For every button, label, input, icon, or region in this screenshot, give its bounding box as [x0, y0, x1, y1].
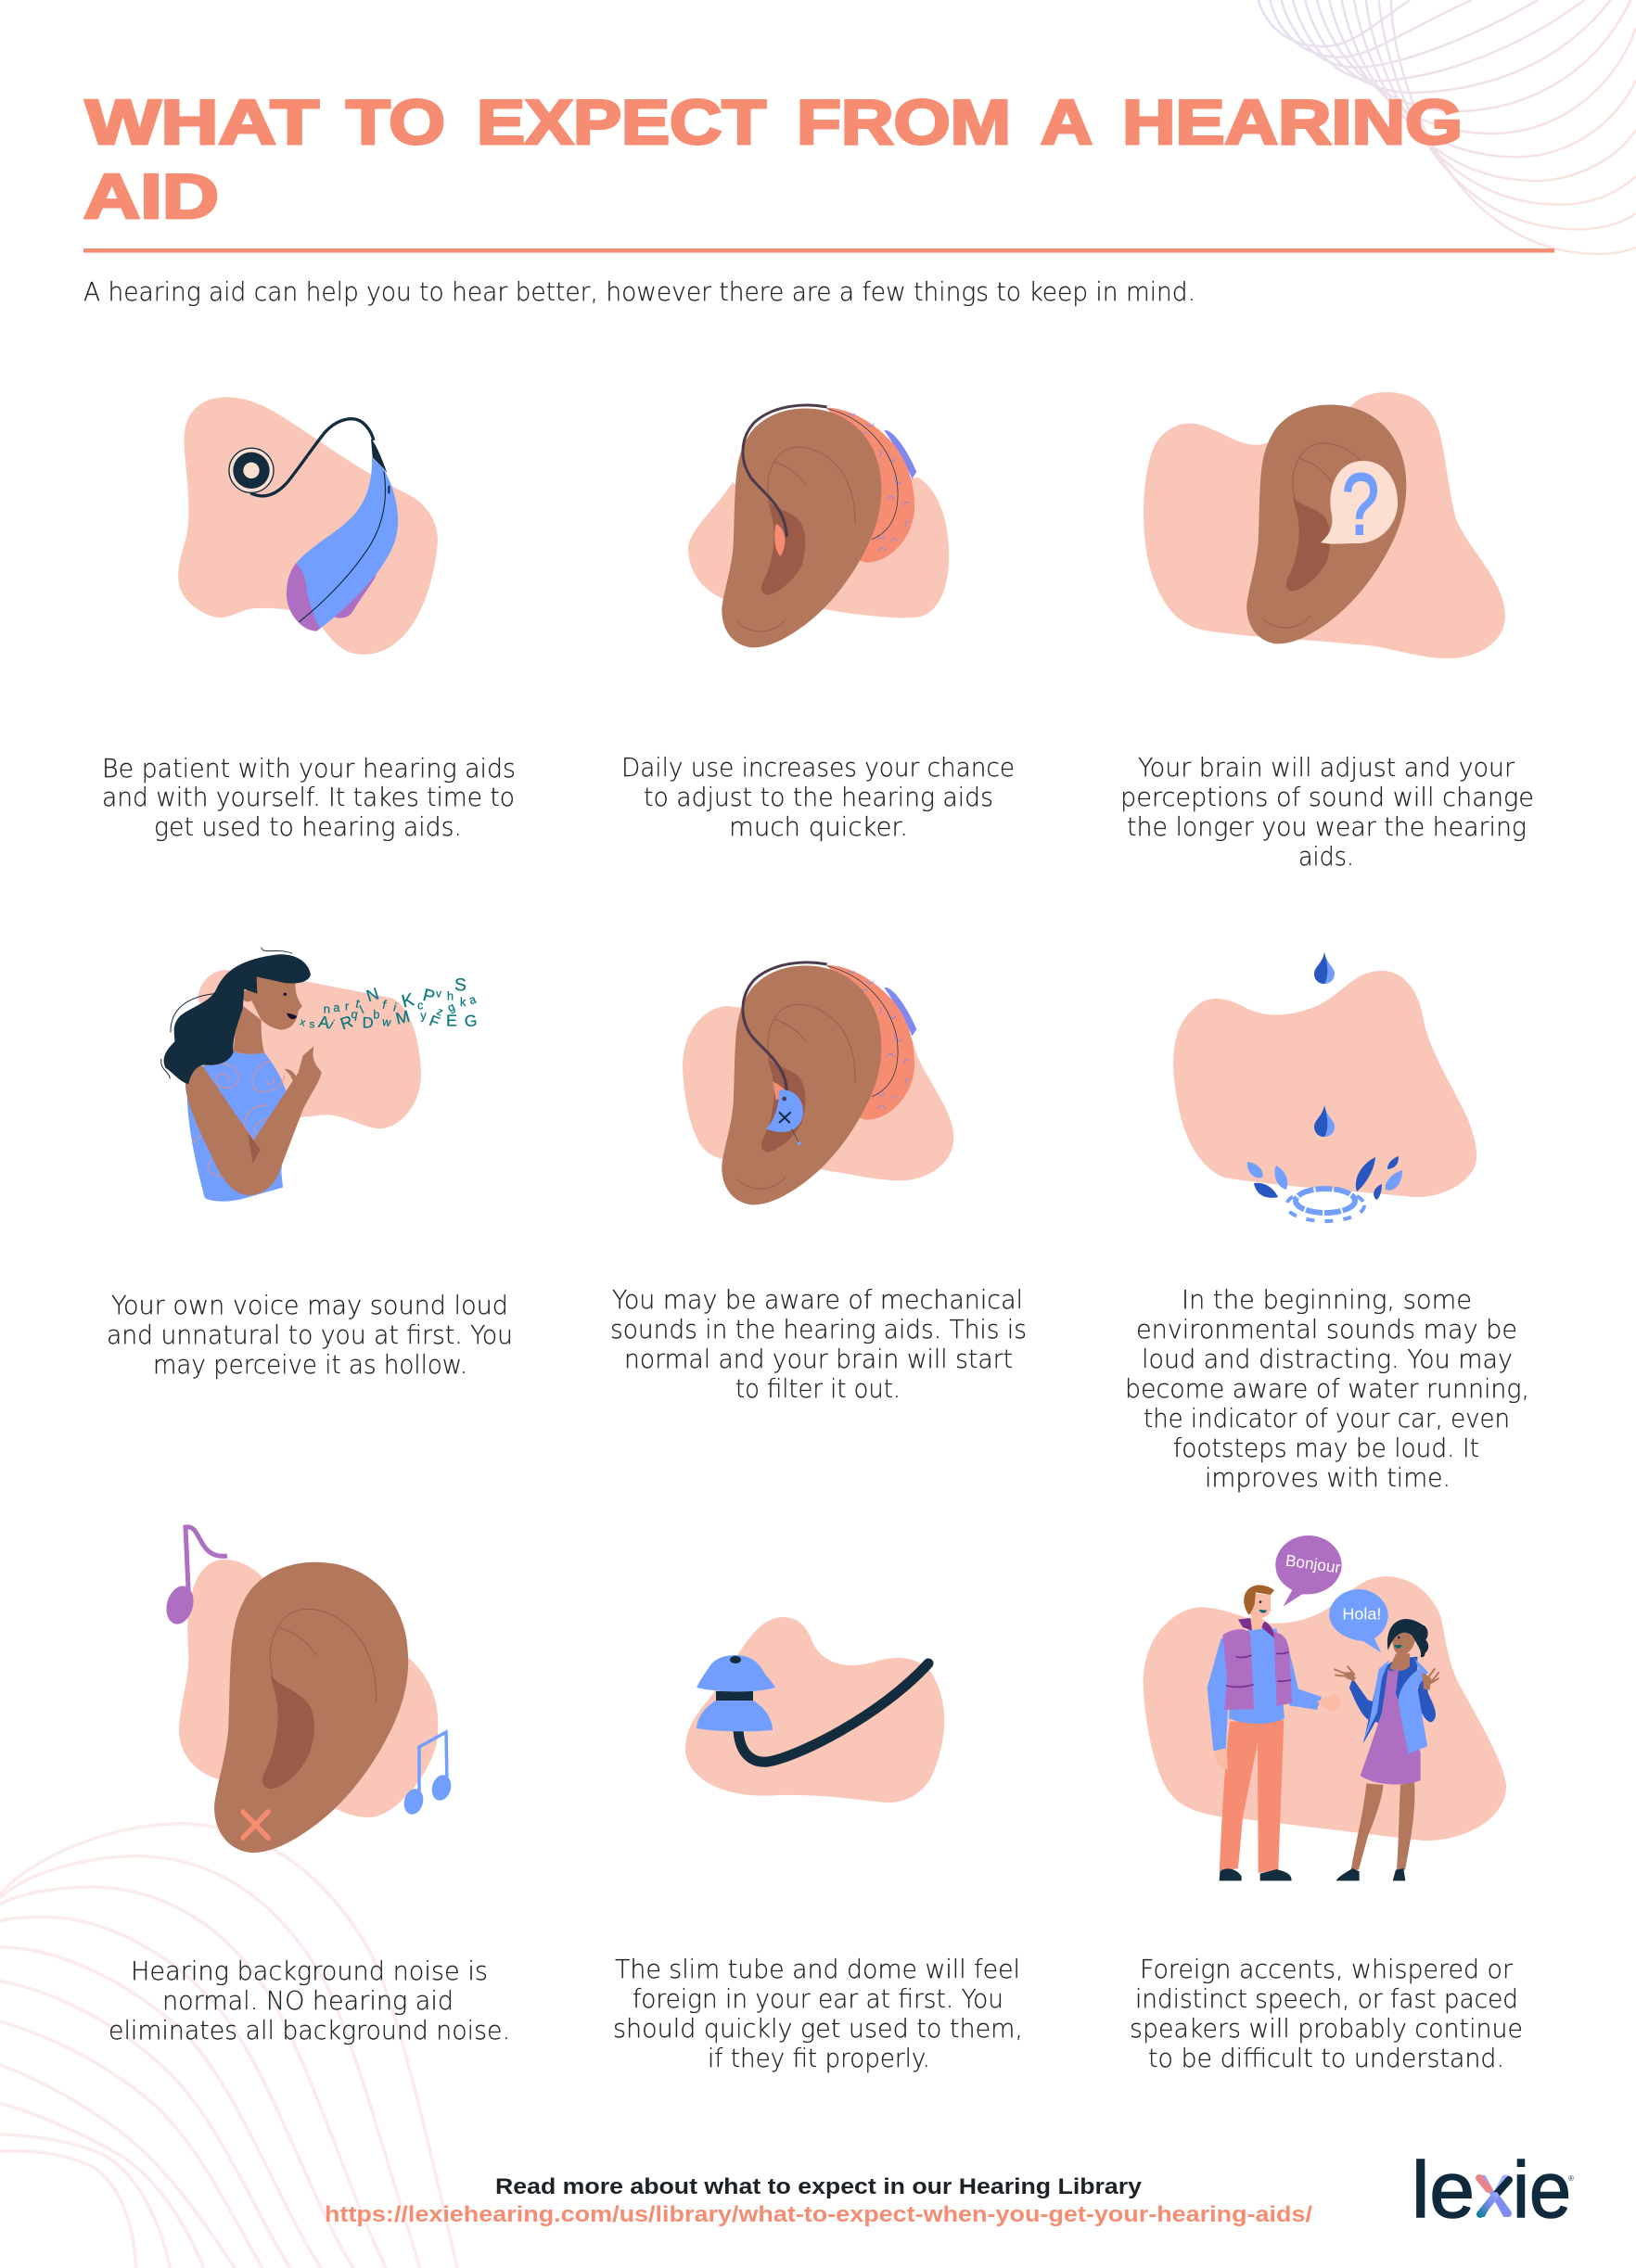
speech letters: y — [420, 1009, 427, 1022]
footer text — [325, 2174, 1312, 2227]
speech letters: G — [464, 1011, 478, 1030]
caption 8: The slim tube and dome will feel — [615, 1955, 1020, 1984]
logo: lexie: ie — [1513, 2147, 1571, 2235]
caption 4: and unnatural to you at first. You — [107, 1320, 513, 1350]
title: EXPECT — [477, 87, 766, 158]
caption 2 — [621, 753, 1015, 842]
illustration: ear with in-ear receiver and tool icon — [683, 962, 953, 1204]
speech letters: F — [427, 1012, 442, 1032]
caption 8: should quickly get used to them, — [613, 2014, 1023, 2044]
decorative curves: top right — [1259, 0, 1636, 254]
illustration: two people talking in foreign languages — [1144, 1535, 1506, 1880]
title: HEARING — [1122, 87, 1463, 158]
decorative curves: bottom left — [0, 1824, 457, 2268]
title: WHAT — [85, 87, 319, 158]
caption 2: much quicker. — [729, 812, 908, 842]
title: FROM — [797, 87, 1011, 158]
speech letters: S — [454, 975, 467, 995]
logo: lexie: ® — [1568, 2174, 1574, 2183]
footer text: Read more about what to expect in our Hearing Library — [495, 2174, 1143, 2199]
caption 9: to be difficult to understand. — [1148, 2044, 1504, 2073]
speech letters: K — [400, 990, 416, 1013]
caption 8 — [613, 1955, 1023, 2073]
caption 8: foreign in your ear at first. You — [633, 1984, 1003, 2014]
speech letters: t — [354, 996, 362, 1011]
caption 5: You may be aware of mechanical — [612, 1285, 1023, 1315]
caption 2: to adjust to the hearing aids — [644, 783, 993, 812]
illustration: slim tube and dome — [685, 1617, 944, 1803]
speech letters — [299, 975, 479, 1033]
speech letters: r — [345, 1000, 349, 1013]
title: AID — [83, 161, 219, 232]
speech letters: w — [380, 1015, 392, 1029]
caption 5: sounds in the hearing aids. This is — [610, 1315, 1027, 1344]
caption 7: normal. NO hearing aid — [162, 1986, 454, 2016]
illustration: ear with question mark — [1144, 392, 1505, 658]
speech letters: c — [417, 999, 423, 1012]
caption 2: Daily use increases your chance — [621, 753, 1015, 783]
caption 4: Your own voice may sound loud — [111, 1291, 508, 1320]
speech letters: l — [358, 1003, 365, 1016]
caption 9: Foreign accents, whispered or — [1140, 1955, 1514, 1984]
logo: lexie — [1412, 2147, 1574, 2235]
illustration: hearing aid device — [178, 397, 438, 655]
speech bubble: Bonjour: Bonjour — [1285, 1550, 1342, 1577]
caption 5: normal and your brain will start — [624, 1344, 1013, 1374]
woman — [1334, 1619, 1439, 1880]
speech letters: n — [324, 1001, 330, 1015]
logo: lexie: le — [1412, 2147, 1475, 2235]
speech letters: v — [436, 987, 441, 1000]
caption 8: if they fit properly. — [708, 2044, 930, 2073]
speech letters: R — [338, 1012, 355, 1033]
speech bubble: Hola — [1329, 1589, 1388, 1652]
caption 5: to filter it out. — [735, 1374, 901, 1404]
heading rule — [83, 248, 1554, 252]
speech letters: h — [447, 989, 454, 1002]
title — [83, 87, 1463, 232]
caption 9: indistinct speech, or fast paced — [1135, 1984, 1518, 2014]
caption 9 — [1130, 1955, 1523, 2073]
illustration: ear wearing hearing aid — [688, 405, 949, 647]
speech letters: j — [327, 1017, 337, 1030]
title: A — [1041, 87, 1093, 158]
subtitle: A hearing aid can help you to hear better, however there are a few things to keep in mind. — [83, 277, 1195, 307]
caption 1: and with yourself. It takes time to — [102, 783, 515, 812]
speech letters: g — [445, 1000, 457, 1014]
caption 3: aids. — [1298, 842, 1354, 872]
caption 4 — [107, 1291, 513, 1380]
logo: lexie: x — [1477, 2147, 1511, 2235]
caption 3: the longer you wear the hearing — [1127, 812, 1527, 842]
speech letters: P — [421, 985, 437, 1006]
speech letters: z — [435, 1004, 445, 1019]
caption 6: improves with time. — [1205, 1463, 1451, 1493]
man — [1208, 1585, 1342, 1880]
speech letters: s — [309, 1017, 314, 1030]
speech letters: k — [460, 996, 467, 1009]
speech letters: f — [381, 998, 388, 1012]
caption 6: loud and distracting. You may — [1142, 1344, 1513, 1374]
illustration: woman speaking with letters — [161, 948, 479, 1202]
footer text: https://lexiehearing.com/us/library/what-to-expect-when-you-get-your-hearing-aids/ — [325, 2202, 1312, 2227]
caption 1: get used to hearing aids. — [154, 812, 462, 842]
caption 1 — [102, 754, 516, 842]
caption 6: environmental sounds may be — [1136, 1315, 1517, 1344]
caption 7: eliminates all background noise. — [109, 2016, 510, 2045]
speech letters: a — [333, 1001, 340, 1014]
caption 6: In the beginning, some — [1182, 1285, 1472, 1315]
caption 4: may perceive it as hollow. — [153, 1350, 467, 1380]
speech letters: i — [392, 1000, 398, 1014]
caption 5 — [610, 1285, 1027, 1404]
speech letters: A — [317, 1013, 331, 1032]
caption 9: speakers will probably continue — [1130, 2014, 1523, 2044]
caption 3 — [1120, 753, 1534, 872]
illustration: ear with question mark: ? — [1342, 455, 1379, 553]
speech letters: M — [393, 1007, 412, 1028]
caption 6 — [1125, 1285, 1529, 1493]
caption 7: Hearing background noise is — [131, 1956, 488, 1986]
speech letters: q — [350, 1007, 359, 1022]
illustration: ear with music notes — [162, 1527, 454, 1853]
speech letters: a — [467, 992, 479, 1007]
speech bubble: Hola: Hola! — [1342, 1605, 1381, 1624]
speech letters: b — [373, 1008, 379, 1021]
speech letters: x — [299, 1016, 307, 1029]
caption 1: Be patient with your hearing aids — [102, 754, 516, 784]
illustration: water drops and splash — [1173, 952, 1476, 1221]
speech bubble: Bonjour — [1275, 1535, 1342, 1607]
caption 6: the indicator of your car, even — [1144, 1404, 1510, 1433]
speech letters: D — [363, 1014, 374, 1032]
speech letters: N — [364, 984, 381, 1005]
caption 3: perceptions of sound will change — [1120, 783, 1534, 812]
caption 7 — [109, 1956, 510, 2045]
caption 6: become aware of water running, — [1125, 1374, 1529, 1404]
caption 6: footsteps may be loud. It — [1173, 1433, 1479, 1463]
title: TO — [346, 87, 445, 158]
speech letters: E — [446, 1012, 457, 1030]
caption 3: Your brain will adjust and your — [1138, 753, 1515, 783]
